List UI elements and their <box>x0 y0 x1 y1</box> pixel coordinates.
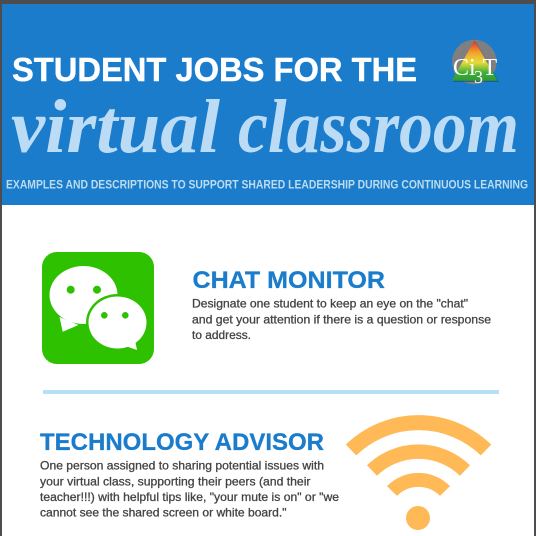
title: virtual classroom <box>11 85 519 169</box>
text: chat monitor description <box>192 296 491 342</box>
title: student jobs: STUDENT JOBS FOR THE <box>12 51 417 88</box>
icon: chat bubbles <box>42 252 154 364</box>
text: technology advisor description: teacher!!!) with helpful tips like, "your mute is on" or "we <box>40 490 339 504</box>
title: virtual classroom: virtual <box>11 85 220 169</box>
heading: technology advisor: TECHNOLOGY ADVISOR <box>40 429 324 456</box>
text: technology advisor description: One person assigned to sharing potential issues with <box>40 458 324 472</box>
heading: chat monitor: CHAT MONITOR <box>192 267 385 294</box>
icon: Ci3T logo: 3 <box>474 67 483 87</box>
icon: Ci3T logo <box>452 40 499 87</box>
icon: Ci3T logo: T <box>482 55 498 81</box>
text: chat monitor description: Designate one student to keep an eye on the "chat" <box>192 296 468 310</box>
text: chat monitor description: and get your attention if there is a question or response <box>192 312 491 326</box>
text: technology advisor description <box>40 458 339 520</box>
header banner <box>2 4 534 205</box>
panel: technology advisor <box>40 429 339 520</box>
icon: Ci3T logo: Ci <box>453 55 476 81</box>
text: technology advisor description: your virtual class, supporting their peers (and their <box>40 474 310 488</box>
text: technology advisor description: cannot see the shared screen or white board." <box>40 506 286 520</box>
icon: wifi <box>351 423 486 530</box>
panel: chat monitor <box>192 267 491 342</box>
text: chat monitor description: to address. <box>192 328 251 342</box>
